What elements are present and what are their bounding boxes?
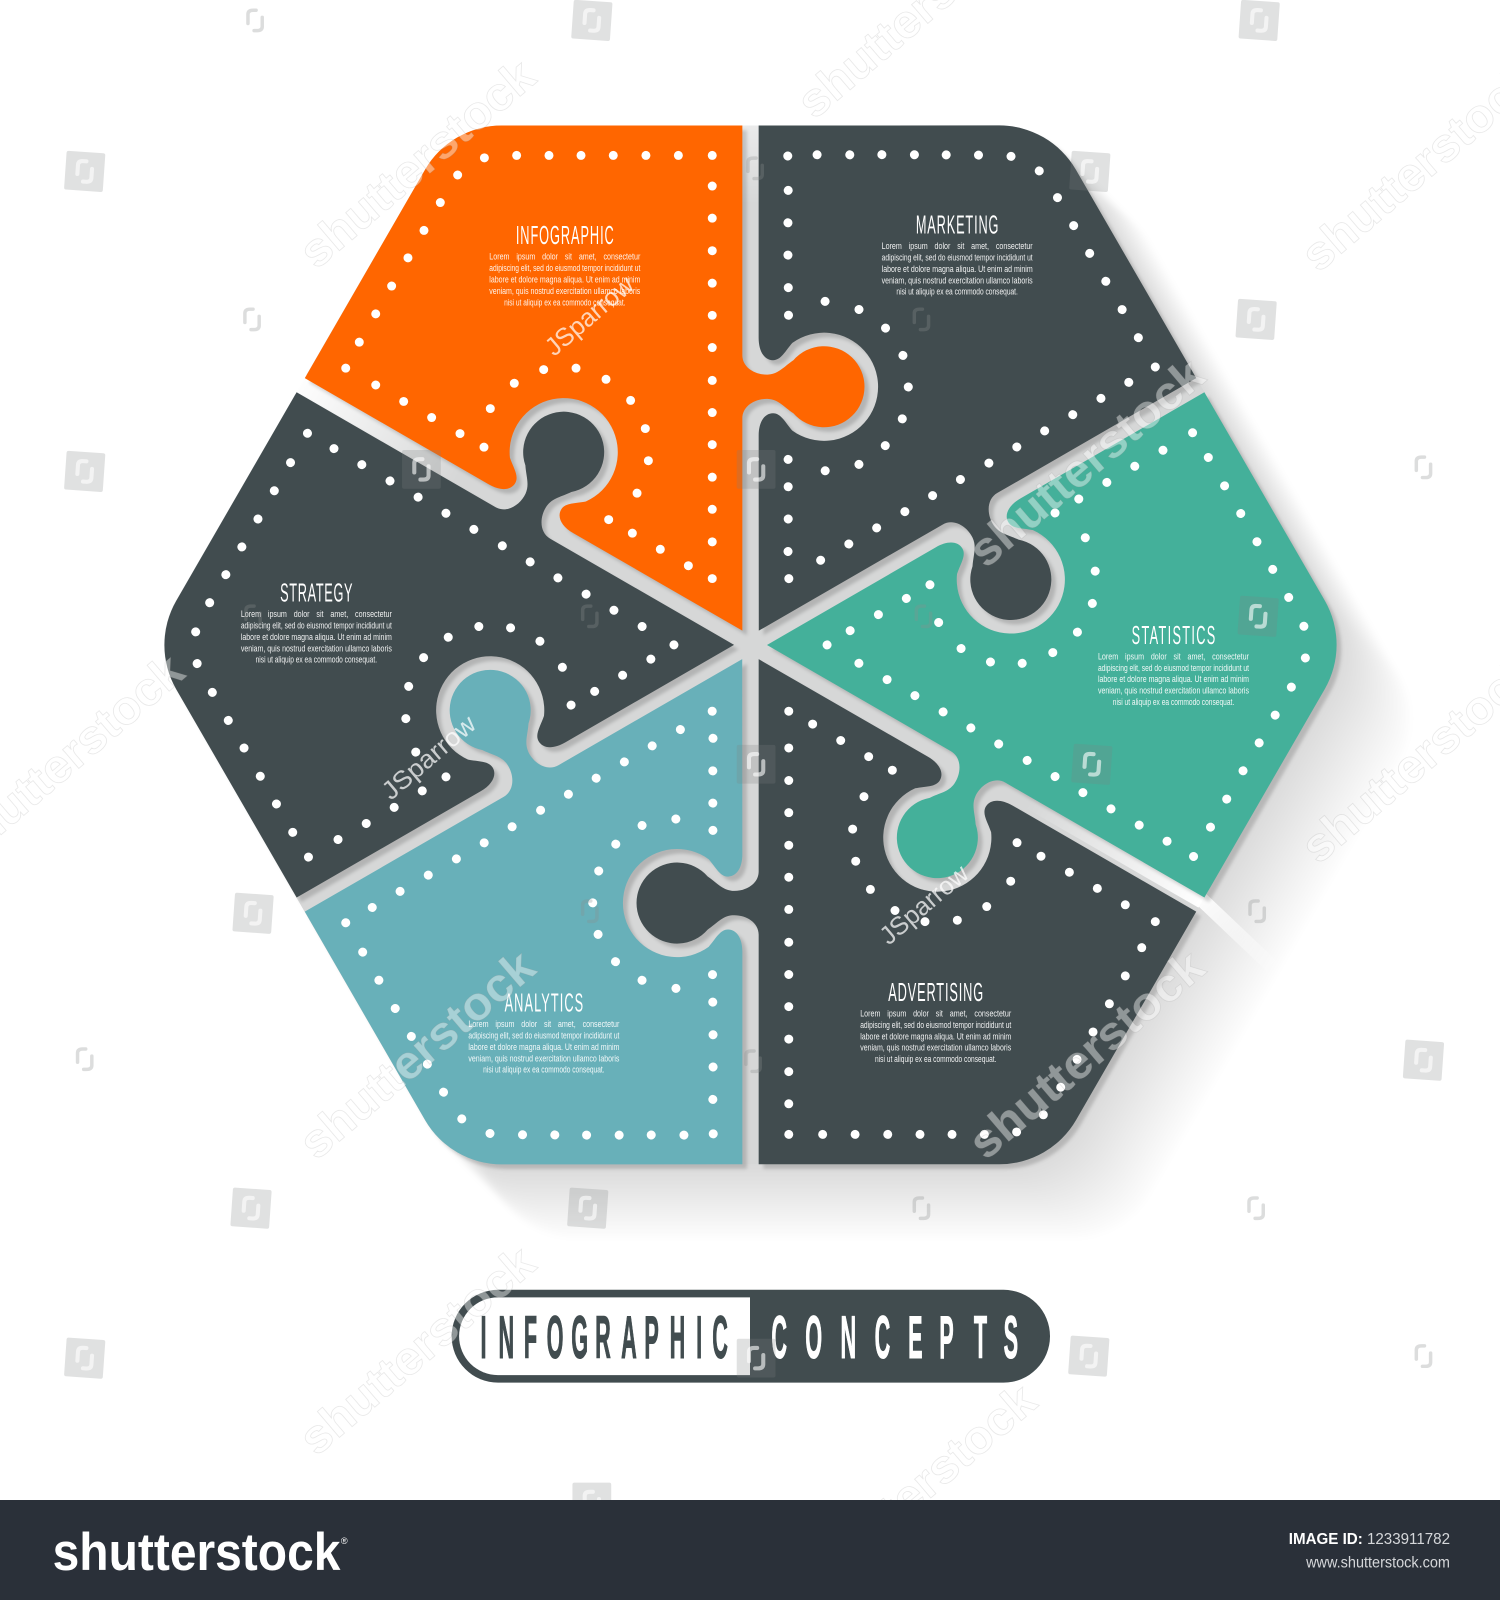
puzzle piece: analytics (blue) [244, 553, 961, 1291]
text block: analytics: ANALYTICS [505, 990, 583, 1018]
text block: strategy: STRATEGY [280, 580, 353, 608]
piece shadows inside the gaps [82, 4, 1428, 1295]
text block: analytics: veniam, quis nostrud exercitation ullamco laboris [468, 1053, 620, 1063]
text block: infographic: Lorem ipsum dolor sit amet, consectetur [489, 252, 640, 262]
watermark: shutterstock text: shutterstock [289, 939, 545, 1169]
text block: strategy: nisi ut aliquip ex ea commodo consequat. [256, 655, 377, 665]
footer logo: shutterstock [53, 1523, 341, 1582]
long shadow of the hexagon [168, 130, 1410, 1238]
text block: analytics [468, 990, 620, 1075]
text block: statistics: STATISTICS [1132, 622, 1215, 650]
puzzle piece: infographic (orange) [305, 126, 864, 631]
text block: infographic [489, 222, 641, 307]
text block: statistics: Lorem ipsum dolor sit amet, consectetur [1098, 651, 1249, 661]
title pill: infographic concepts [452, 1290, 1050, 1383]
watermark: shutterstock text: shutterstock [958, 939, 1215, 1169]
text block: analytics: labore et dolore magna aliqua. Ut enim ad minim [468, 1042, 619, 1052]
watermark: author names: JSparrow [540, 270, 640, 362]
text block: advertising: Lorem ipsum dolor sit amet, consectetur [860, 1008, 1011, 1018]
text block: marketing: nisi ut aliquip ex ea commodo consequat. [896, 287, 1018, 297]
text block: advertising: adipiscing elit, sed do eiusmod tempor incididunt ut [860, 1020, 1012, 1030]
site url: www.shutterstock.com [1305, 1554, 1450, 1571]
puzzle piece: statistics (teal) [706, 266, 1423, 1003]
text block: strategy: labore et dolore magna aliqua. Ut enim ad minim [241, 632, 392, 642]
text block: strategy: adipiscing elit, sed do eiusmod tempor incididunt ut [241, 620, 392, 630]
puzzle piece: strategy (dark) [78, 286, 795, 1024]
text block: statistics [1098, 622, 1249, 707]
text block: marketing: Lorem ipsum dolor sit amet, consectetur [882, 241, 1033, 251]
text block: analytics: adipiscing elit, sed do eiusmod tempor incididunt ut [468, 1030, 620, 1040]
puzzle piece: advertising (dark) [637, 659, 1196, 1164]
text block: infographic: veniam, quis nostrud exercitation ullamco laboris [489, 286, 641, 296]
watermark: author names: JSparrow [874, 859, 975, 950]
text block: marketing: veniam, quis nostrud exercitation ullamco laboris [882, 275, 1033, 285]
text block: statistics: nisi ut aliquip ex ea commodo consequat. [1113, 697, 1234, 707]
text block: strategy [241, 580, 392, 665]
watermark: shutterstock text: shutterstock [289, 48, 545, 278]
text block: marketing: adipiscing elit, sed do eiusmod tempor incididunt ut [882, 252, 1033, 262]
text block: marketing [882, 212, 1033, 297]
watermark: author names: JSparrow [377, 710, 482, 806]
text block: marketing: MARKETING [916, 212, 998, 240]
text block: infographic: INFOGRAPHIC [516, 222, 614, 250]
text block: strategy: veniam, quis nostrud exercitation ullamco laboris [241, 643, 392, 653]
text block: advertising: labore et dolore magna aliqua. Ut enim ad minim [860, 1031, 1011, 1041]
text block: advertising: ADVERTISING [888, 979, 983, 1007]
text block: strategy: Lorem ipsum dolor sit amet, consectetur [241, 609, 392, 619]
text block: advertising [860, 979, 1012, 1064]
text block: statistics: veniam, quis nostrud exercitation ullamco laboris [1098, 686, 1249, 696]
footer bar [0, 1500, 1500, 1600]
watermark: author names [377, 270, 975, 950]
text block: infographic: nisi ut aliquip ex ea commodo consequat. [504, 297, 626, 307]
text block: analytics: nisi ut aliquip ex ea commodo consequat. [483, 1065, 605, 1075]
text block: infographic: adipiscing elit, sed do eiusmod tempor incididunt ut [489, 263, 641, 273]
puzzle piece: marketing (dark) [540, 0, 1257, 736]
title word: infographic: INFOGRAPHIC [480, 1304, 728, 1371]
image id: IMAGE ID: 1233911782 [1289, 1531, 1450, 1548]
watermark: shutterstock text: shutterstock [958, 347, 1215, 577]
watermark: shutterstock text: shutterstock [790, 1373, 1046, 1600]
registered mark: ® [341, 1536, 348, 1546]
watermark: small marks [78, 10, 1431, 1366]
text block: advertising: nisi ut aliquip ex ea commodo consequat. [875, 1054, 996, 1064]
text block: analytics: Lorem ipsum dolor sit amet, consectetur [468, 1019, 619, 1029]
title word: concepts: CONCEPTS [771, 1304, 1018, 1371]
watermark: shutterstock text: shutterstock [289, 1235, 545, 1465]
hexagon backdrop showing through the gaps [164, 126, 1337, 1164]
text block: advertising: veniam, quis nostrud exercitation ullamco laboris [860, 1043, 1012, 1053]
text block: statistics: labore et dolore magna aliqua. Ut enim ad minim [1098, 674, 1249, 684]
text block: statistics: adipiscing elit, sed do eiusmod tempor incididunt ut [1098, 663, 1249, 673]
text block: marketing: labore et dolore magna aliqua. Ut enim ad minim [882, 264, 1033, 274]
text block: infographic: labore et dolore magna aliqua. Ut enim ad minim [489, 274, 640, 284]
